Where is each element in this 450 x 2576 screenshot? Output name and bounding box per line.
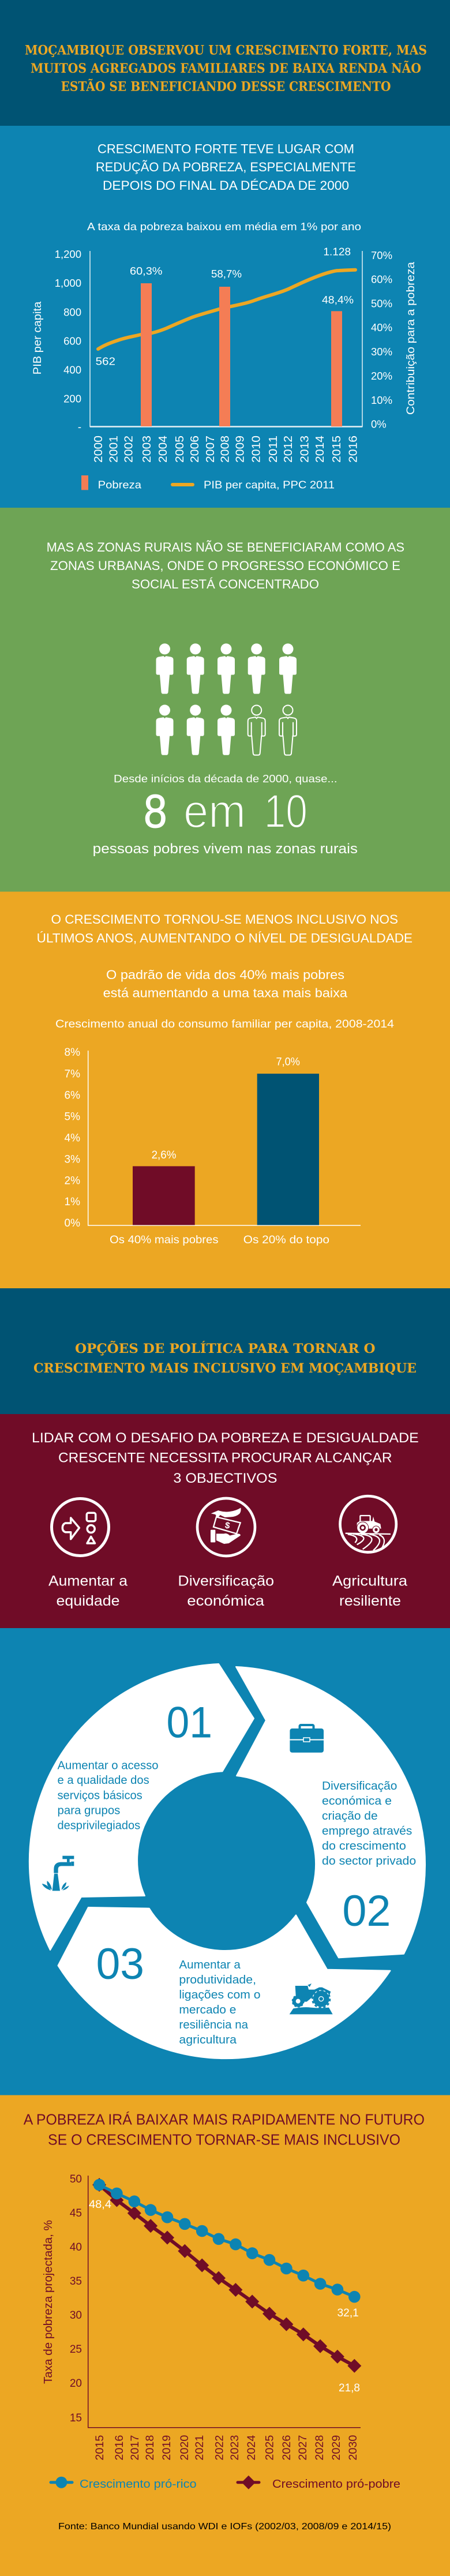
legend [81, 475, 335, 491]
segment 03 [58, 1907, 390, 2058]
panel: inequality [0, 892, 450, 1288]
text: agricultural productivity: agricultura [179, 2034, 237, 2046]
heading: policy options: OPÇÕES DE POLÍTICA PARA TORNAR O [75, 1341, 376, 1356]
data labels: 2,6% [152, 1149, 176, 1161]
big stat: 8 em 10: 10 [264, 785, 308, 838]
category labels: Os 40% mais pobres [110, 1234, 218, 1246]
axis title: Taxa de pobreza projectada, % [42, 2220, 55, 2384]
text: economic diversification: emprego através [322, 1825, 412, 1838]
y axis labels [70, 2173, 82, 2424]
left axis labels: 600 [63, 335, 81, 347]
right axis labels: 60% [371, 273, 392, 286]
y axis labels: 4% [65, 1133, 80, 1145]
x axis years: 2015 [331, 436, 343, 463]
series: pro-poor growth [92, 2178, 361, 2373]
data labels: 48,4% [322, 294, 354, 306]
heading: less inclusive growth [37, 912, 412, 945]
y axis labels: 7% [65, 1068, 80, 1080]
title: ESTÃO SE BENEFICIANDO DESSE CRESCIMENTO [61, 79, 391, 95]
icon: resilient agriculture [340, 1496, 396, 1552]
text: poor people in rural areas: pessoas pobres vivem nas zonas rurais [93, 841, 358, 857]
x axis years: 2023 [229, 2435, 241, 2461]
text: economic diversification: Diversificação [322, 1780, 397, 1793]
icon: tractor [290, 1983, 333, 2014]
x axis years: 2007 [204, 436, 217, 463]
left axis labels [55, 248, 81, 433]
right axis labels: 50% [371, 297, 392, 309]
x axis years: 2016 [114, 2435, 126, 2461]
data labels: 1.128 [323, 246, 351, 258]
x axis years: 2003 [141, 436, 153, 463]
icon: water tap [42, 1856, 74, 1891]
text: access to basic services: e a qualidade dos [58, 1774, 149, 1787]
right axis labels: 70% [371, 249, 392, 261]
left axis labels: 200 [63, 392, 81, 404]
legend [51, 2476, 400, 2491]
heading: rural areas: SOCIAL ESTÁ CONCENTRADO [132, 577, 319, 591]
x axis years: 2011 [267, 436, 280, 463]
text: economic diversification [322, 1780, 416, 1868]
heading: policy options: CRESCIMENTO MAIS INCLUSIVO EM MOÇAMBIQUE [33, 1361, 417, 1376]
right axis labels: 30% [371, 346, 392, 358]
panel: objectives cycle [0, 1628, 450, 2095]
right axis labels: 10% [371, 394, 392, 406]
heading: less inclusive growth: ÚLTIMOS ANOS, AUMENTANDO O NÍVEL DE DESIGUALDADE [37, 931, 412, 945]
icon: ten people, eight filled [156, 643, 297, 755]
panel: header [0, 0, 450, 126]
x axis years: 2001 [107, 436, 120, 463]
x axis years: 2017 [129, 2435, 141, 2461]
x axis years: 2014 [314, 436, 327, 463]
segment 01 [29, 1664, 254, 1950]
text: access to basic services: Aumentar o acesso [58, 1759, 159, 1772]
heading: three objectives [32, 1430, 419, 1486]
icon: economic diversification [197, 1498, 255, 1556]
x axis years: 2020 [179, 2435, 191, 2461]
category labels: Os 20% do topo [243, 1234, 329, 1246]
text: agricultural productivity: ligações com o [179, 1989, 261, 2001]
x axis years: 2025 [264, 2435, 276, 2461]
right axis labels [371, 249, 392, 430]
heading: strong growth: CRESCIMENTO FORTE TEVE LUGAR COM [97, 142, 354, 156]
objective labels: Agricultura [332, 1573, 407, 1589]
objective labels: equidade [57, 1593, 120, 1609]
heading: strong growth: REDUÇÃO DA POBREZA, ESPECIALMENTE [96, 160, 356, 174]
bar: top 20% [257, 1074, 319, 1225]
y axis labels: 8% [65, 1047, 80, 1059]
text: economic diversification: do sector privado [322, 1855, 416, 1868]
x axis years: 2030 [347, 2435, 359, 2461]
text: agricultural productivity: resiliência na [179, 2019, 249, 2031]
heading: rural areas: MAS AS ZONAS RURAIS NÃO SE BENEFICIARAM COMO AS [47, 540, 404, 554]
x axis years: 2005 [174, 436, 186, 463]
x axis years: 2028 [314, 2435, 326, 2461]
x axis years: 2000 [92, 436, 105, 463]
segment 03: 03 [96, 1940, 144, 1989]
right axis labels: 0% [371, 418, 387, 430]
x axis years: 2009 [234, 436, 246, 463]
axis title: right: Contribuição para a pobreza [405, 262, 417, 415]
y axis labels: 45 [70, 2207, 82, 2219]
objective labels: resiliente [339, 1593, 401, 1609]
objective labels: económica [187, 1593, 264, 1609]
x axis years: 2022 [213, 2435, 226, 2461]
x axis years: 2012 [282, 436, 295, 463]
y axis labels: 5% [65, 1111, 80, 1123]
x axis years: 2029 [331, 2435, 343, 2461]
panel: growth and poverty [0, 126, 450, 508]
big stat: 8 em 10 [144, 785, 308, 838]
left axis labels: - [78, 421, 81, 433]
data labels: 48,4 [89, 2199, 111, 2211]
data labels: 32,1 [337, 2307, 359, 2319]
objective labels: Diversificação [178, 1573, 274, 1589]
x axis years: 2010 [250, 436, 263, 463]
heading: rural areas [47, 540, 404, 591]
big stat: 8 em 10: 8 [144, 785, 167, 838]
y axis labels: 40 [70, 2241, 82, 2253]
x axis years: 2015 [94, 2435, 106, 2461]
data labels: 562 [96, 355, 115, 368]
text: access to basic services [58, 1759, 159, 1832]
title: MOÇAMBIQUE OBSERVOU UM CRESCIMENTO FORTE, MAS [25, 43, 427, 58]
heading: less inclusive growth: O CRESCIMENTO TORNOU-SE MENOS INCLUSIVO NOS [51, 912, 398, 927]
panel: future poverty [0, 2095, 450, 2576]
bar: poorest 40% [133, 1166, 195, 1225]
data labels: 7,0% [276, 1056, 300, 1068]
panel: rural areas [0, 508, 450, 892]
text: access to basic services: para grupos [58, 1804, 120, 1817]
title [25, 43, 427, 95]
right axis labels: 40% [371, 321, 392, 333]
segment 02 [236, 1667, 425, 1958]
segment 02: 02 [342, 1887, 391, 1936]
heading: future poverty: A POBREZA IRÁ BAIXAR MAIS RAPIDAMENTE NO FUTURO [24, 2111, 425, 2128]
combo chart: poverty bars and GDP line [32, 246, 417, 463]
legend: Crescimento pró-rico [80, 2478, 197, 2491]
x axis years: 2026 [281, 2435, 293, 2461]
legend: Pobreza [98, 479, 142, 491]
heading: policy options [33, 1341, 417, 1376]
text: since early 2000s: Desde inícios da década de 2000, quase... [114, 773, 337, 785]
heading: three objectives: 3 OBJECTIVOS [173, 1471, 277, 1486]
subheading: standard of living [103, 968, 348, 1000]
data labels [96, 246, 354, 368]
series: pro-rich growth [93, 2179, 361, 2303]
y axis labels: 35 [70, 2275, 82, 2288]
segment 01: 01 [166, 1698, 212, 1748]
y axis labels: 25 [70, 2343, 82, 2356]
heading: strong growth [96, 142, 356, 193]
data labels [89, 2199, 360, 2394]
icon: equity [52, 1499, 108, 1555]
left axis labels: 800 [63, 306, 81, 318]
x axis years: 2021 [194, 2435, 206, 2461]
icon: briefcase [290, 1725, 324, 1753]
data labels: 21,8 [339, 2382, 360, 2394]
text: economic diversification: criação de [322, 1810, 378, 1823]
heading: three objectives: CRESCENTE NECESSITA PROCURAR ALCANÇAR [58, 1450, 392, 1466]
y axis labels: 2% [65, 1175, 80, 1187]
text: access to basic services: serviços básicos [58, 1789, 142, 1802]
big stat: 8 em 10: em [183, 785, 246, 838]
legend: Crescimento pró-pobre [272, 2478, 400, 2491]
text: agricultural productivity: produtividade, [179, 1974, 256, 1986]
data labels: 60,3% [130, 265, 163, 277]
objective labels [48, 1573, 407, 1609]
heading: strong growth: DEPOIS DO FINAL DA DÉCADA DE 2000 [103, 178, 349, 193]
x axis years: 2018 [144, 2435, 156, 2461]
y axis labels: 0% [65, 1217, 80, 1229]
text: access to basic services: desprivilegiados [58, 1819, 140, 1832]
chart subtitle: A taxa da pobreza baixou em média em 1% por ano [87, 220, 361, 233]
x axis years: 2008 [219, 436, 232, 463]
heading: three objectives: LIDAR COM O DESAFIO DA POBREZA E DESIGUALDADE [32, 1430, 419, 1446]
subheading: standard of living: está aumentando a uma taxa mais baixa [103, 986, 348, 1000]
icon: economic diversification: $ [224, 1520, 231, 1531]
line chart: projected poverty [42, 2173, 361, 2461]
text: agricultural productivity [179, 1959, 261, 2046]
x axis years [94, 2435, 359, 2461]
axis title: left: PIB per capita [32, 301, 44, 374]
left axis labels: 1,000 [55, 277, 81, 289]
y axis labels: 1% [65, 1196, 80, 1208]
x axis years: 2013 [299, 436, 312, 463]
x axis years [92, 436, 359, 463]
subheading: standard of living: O padrão de vida dos 40% mais pobres [106, 968, 344, 982]
legend: PIB per capita, PPC 2011 [204, 479, 335, 491]
objective labels: Aumentar a [48, 1573, 127, 1589]
data labels [152, 1056, 300, 1161]
line: GDP per capita [98, 270, 355, 349]
text: agricultural productivity: mercado e [179, 2004, 236, 2016]
chart subtitle: Crescimento anual do consumo familiar per capita, 2008-2014 [55, 1018, 394, 1030]
x axis years: 2002 [122, 436, 135, 463]
x axis years: 2024 [246, 2435, 258, 2461]
y axis labels [65, 1047, 80, 1229]
x axis years: 2006 [189, 436, 201, 463]
heading: rural areas: ZONAS URBANAS, ONDE O PROGRESSO ECONÓMICO E [50, 558, 400, 573]
text: economic diversification: económica e [322, 1795, 392, 1808]
source note: Fonte: Banco Mundial usando WDI e IOFs (2002/03, 2008/09 e 2014/15) [58, 2522, 391, 2532]
x axis years: 2019 [161, 2435, 173, 2461]
text: economic diversification: do crescimento [322, 1840, 406, 1853]
x axis years: 2027 [297, 2435, 309, 2461]
y axis labels: 6% [65, 1089, 80, 1102]
x axis years: 2016 [347, 436, 359, 463]
panel: policy options header [0, 1288, 450, 1414]
x axis years: 2004 [157, 436, 170, 463]
text: agricultural productivity: Aumentar a [179, 1959, 241, 1971]
right axis labels: 20% [371, 370, 392, 382]
y axis labels: 20 [70, 2378, 82, 2390]
heading: future poverty: SE O CRESCIMENTO TORNAR-SE MAIS INCLUSIVO [48, 2131, 400, 2148]
bar chart: household consumption growth [65, 1047, 361, 1246]
y axis labels: 3% [65, 1154, 80, 1166]
left axis labels: 400 [63, 364, 81, 376]
category labels [110, 1234, 329, 1246]
bars: poverty [141, 283, 342, 426]
data labels: 58,7% [211, 268, 242, 280]
panel: three objectives [0, 1414, 450, 1628]
title: MUITOS AGREGADOS FAMILIARES DE BAIXA RENDA NÃO [31, 61, 421, 76]
y axis labels: 30 [70, 2309, 82, 2322]
heading: future poverty [24, 2111, 425, 2148]
y axis labels: 50 [70, 2173, 82, 2185]
left axis labels: 1,200 [55, 248, 81, 260]
y axis labels: 15 [70, 2412, 82, 2424]
